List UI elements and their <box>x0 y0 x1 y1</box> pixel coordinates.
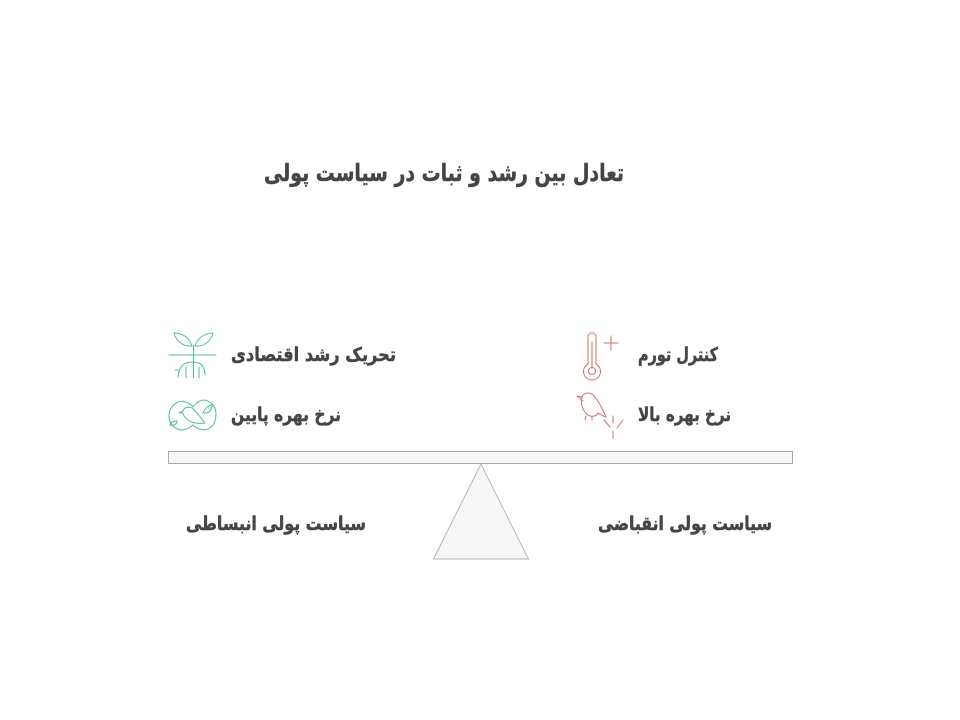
icon: bird in circles (low interest) <box>169 400 216 430</box>
label: stimulate economic growth: تحریک رشد اقتصادی <box>231 344 396 366</box>
label: inflation control: کنترل تورم <box>638 344 719 366</box>
icon: sprout with roots <box>169 333 216 378</box>
label: low interest rate: نرخ بهره پایین <box>231 404 341 426</box>
label: high interest rate: نرخ بهره بالا <box>638 404 731 426</box>
title: تعادل بین رشد و ثبات در سیاست پولی <box>264 159 624 187</box>
icon: thermometer with plus <box>584 333 618 380</box>
fulcrum triangle <box>434 464 528 559</box>
balance beam <box>168 452 792 464</box>
icon: bird with rays (high interest) <box>577 393 623 438</box>
label: expansionary monetary policy: سیاست پولی انبساطی <box>186 513 366 535</box>
label: contractionary monetary policy: سیاست پولی انقباضی <box>598 513 772 535</box>
